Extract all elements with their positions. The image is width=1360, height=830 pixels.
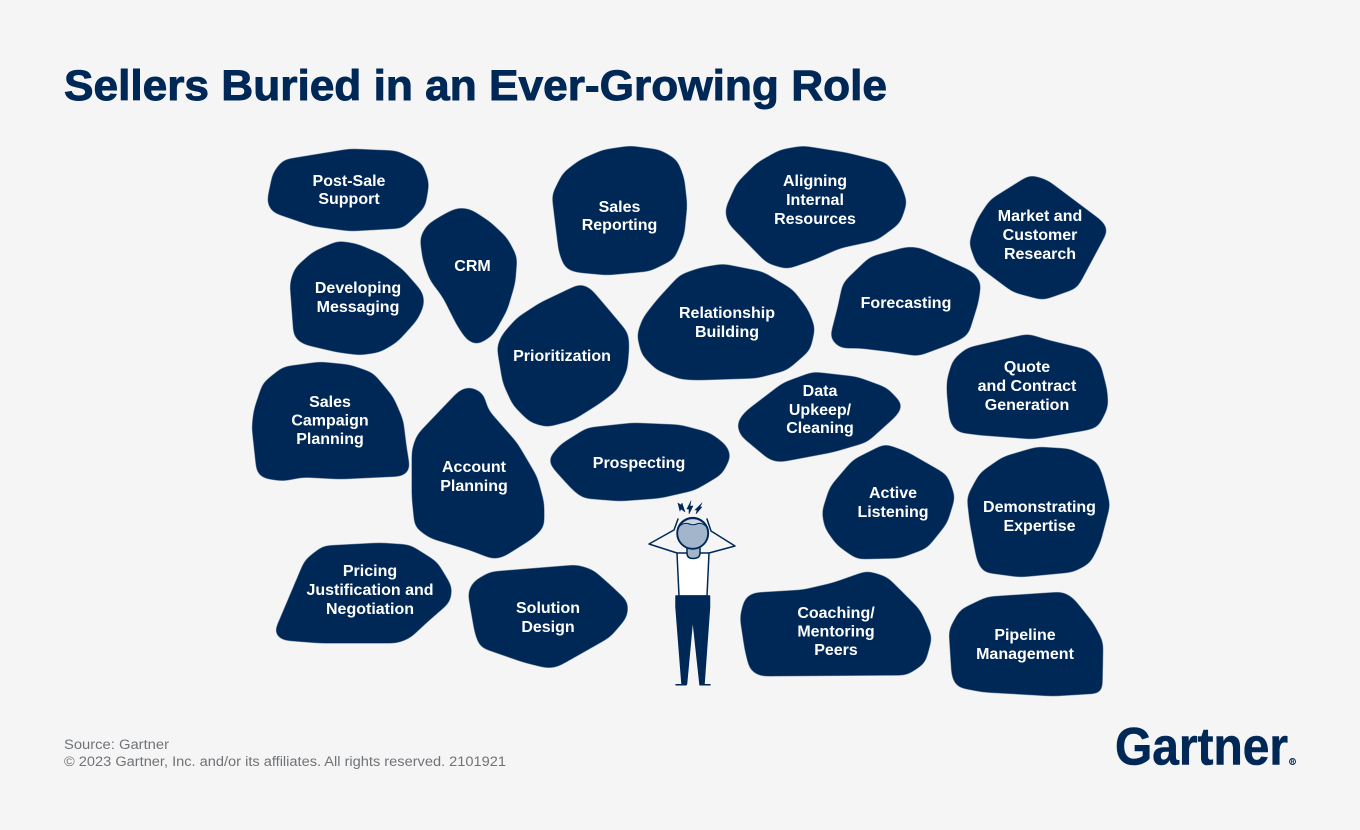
blob: Pipeline Management: Pipeline [994, 627, 1056, 644]
blob: Market and Customer Research: Market and [998, 208, 1082, 225]
Gartner logo: Gartner [1115, 718, 1288, 776]
blob: Post-Sale Support: Support [318, 191, 380, 208]
blob: Forecasting: Forecasting [861, 295, 951, 312]
blob: Coaching/Mentoring Peers: Peers [814, 642, 858, 659]
head [677, 518, 708, 549]
blob: Forecasting [830, 247, 981, 356]
blob: Quote and Contract Generation: Quote [1004, 359, 1050, 376]
torso [677, 553, 709, 596]
blob: Sales Campaign Planning: Sales [309, 394, 351, 411]
source note: Source: Gartner [64, 737, 170, 752]
trousers [676, 596, 710, 684]
feet [676, 684, 710, 686]
blob: Coaching/Mentoring Peers [740, 571, 932, 676]
blob: Solution Design: Design [521, 619, 575, 636]
blob: Post-Sale Support [267, 149, 429, 231]
blob: CRM [420, 208, 517, 345]
blob: CRM: CRM [454, 258, 491, 275]
blob: Relationship Building: Relationship [679, 305, 775, 322]
blob: Sales Campaign Planning [252, 362, 410, 481]
blob: Data Upkeep/Cleaning: Upkeep/ [789, 402, 852, 419]
blob: Market and Customer Research: Customer [1003, 227, 1077, 244]
blob: Aligning Internal Resources: Aligning [783, 173, 847, 190]
blob: Account Planning: Planning [440, 478, 508, 495]
blob: Developing Messaging: Developing [315, 280, 401, 297]
blob: Relationship Building: Building [695, 324, 759, 341]
blob: Pipeline Management: Management [976, 646, 1075, 663]
blob: Data Upkeep/Cleaning: Cleaning [786, 420, 854, 437]
blob: Market and Customer Research: Research [1004, 246, 1076, 263]
icon: stressed seller figure [649, 501, 735, 685]
blob: Active Listening: Listening [857, 504, 929, 521]
hair [679, 519, 706, 527]
icon: stress bolts [678, 501, 702, 514]
blob: Developing Messaging [290, 241, 424, 355]
neck [687, 544, 700, 558]
blob: Active Listening: Active [869, 485, 917, 502]
blob: Pricing Justification and Negotiation [274, 543, 452, 643]
blob: Quote and Contract Generation: Generation [985, 397, 1069, 414]
blob: Sales Reporting: Reporting [582, 217, 657, 234]
blob: Sales Reporting: Sales [599, 199, 641, 216]
blob: Sales Campaign Planning: Planning [296, 431, 364, 448]
blob: Prospecting: Prospecting [593, 455, 685, 472]
blob: Solution Design: Solution [516, 600, 580, 617]
blob: Relationship Building [637, 264, 815, 380]
arms [649, 519, 678, 553]
source note: © 2023 Gartner, Inc. and/or its affiliates. All rights reserved. 2101921 [64, 754, 506, 769]
blob: Aligning Internal Resources: Resources [774, 211, 856, 228]
blob: Pricing Justification and Negotiation: Pricing [343, 563, 397, 580]
blob: Prospecting [548, 423, 731, 501]
blob: Quote and Contract Generation: and Contract [978, 378, 1077, 395]
blob: Active Listening [822, 444, 955, 559]
blob: Demonstrating Expertise: Expertise [1003, 518, 1076, 535]
blob: Pricing Justification and Negotiation: Negotiation [326, 601, 414, 618]
blob: Account Planning [412, 387, 544, 559]
blob: Market and Customer Research [969, 175, 1108, 300]
blob: Prioritization: Prioritization [513, 348, 611, 365]
blob: Data Upkeep/Cleaning [737, 372, 903, 462]
blob: Pricing Justification and Negotiation: Justification and [306, 582, 434, 599]
blob: Sales Reporting [552, 146, 687, 275]
blob: Demonstrating Expertise: Demonstrating [983, 499, 1096, 516]
Gartner logo: R [1291, 760, 1295, 766]
blob: Pipeline Management [949, 592, 1103, 696]
blob: Aligning Internal Resources [725, 146, 907, 269]
blob: Aligning Internal Resources: Internal [786, 192, 844, 209]
blob: Data Upkeep/Cleaning: Data [803, 383, 837, 400]
blob: Account Planning: Account [442, 459, 507, 476]
blob: Sales Campaign Planning: Campaign [291, 412, 369, 430]
blob: Coaching/Mentoring Peers: Mentoring [797, 624, 875, 640]
blob: Quote and Contract Generation [947, 334, 1108, 439]
blob: Solution Design [468, 565, 628, 668]
blob: Post-Sale Support: Post-Sale [313, 173, 386, 190]
blob: Developing Messaging: Messaging [317, 299, 399, 316]
title: Sellers Buried in an Ever-Growing Role [64, 62, 887, 110]
blob: Demonstrating Expertise [967, 447, 1110, 577]
blob: Prioritization [497, 284, 629, 427]
blob: Coaching/Mentoring Peers: Coaching/ [797, 605, 875, 622]
